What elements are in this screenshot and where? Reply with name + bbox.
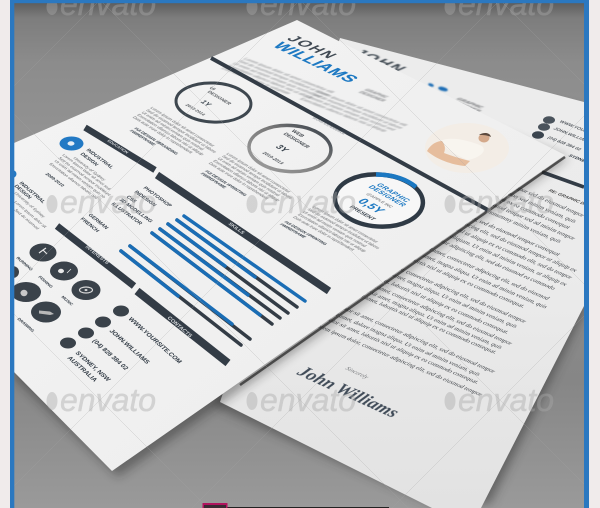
contacts heading: CONTACTS xyxy=(165,316,193,339)
experience label: WORK EXPERIENCE xyxy=(311,117,347,135)
education entry two: Lorem ipsum dolor sit xyxy=(13,200,49,229)
letter body text: Lorem ipsum dolor sit amet, dolore magna aliquam. Ut enim ad minim veniam, ut aliquip ex xyxy=(346,191,570,288)
letter body text: Lorem ipsum dolor sit amet, magna aliqua. Ut enim ad minim veniam, quis xyxy=(367,231,549,310)
education entry one: Lorem ipsum dolor sit amet sed xyxy=(61,153,113,191)
back sheet name: JOHN xyxy=(347,48,411,75)
education entry one xyxy=(44,136,115,200)
skills heading: SKILLS xyxy=(226,222,246,236)
header intro text left: Duis aute irure dolor in voluptate xyxy=(219,67,292,95)
job text: web designer: Sed do eiusmod tempor incididunt ut labore xyxy=(221,154,294,200)
skills heading xyxy=(157,175,329,291)
header intro text right: Sed do eiusmod tempor incididunt ut labore xyxy=(309,93,404,130)
job text: UI designer: #UI DESIGN #BRANDING xyxy=(133,127,180,155)
back sheet shadow xyxy=(214,306,584,508)
contact lines xyxy=(547,120,584,162)
back sheet job title: DESIGNER xyxy=(449,100,483,113)
header intro text left: Exercitation ullamco laboris nisi ut aliquip xyxy=(225,65,315,100)
interest labels: FISHING xyxy=(37,275,54,289)
job text: graphic designer: #WIREFRAME xyxy=(279,223,308,239)
contact text: WWW.YOURSITE.COM xyxy=(126,316,183,365)
envato watermarks: envato xyxy=(458,184,554,220)
contact entries xyxy=(60,306,183,383)
education entry two: INDUSTRIAL xyxy=(17,181,47,205)
icon: email xyxy=(95,316,111,328)
job text: UI designer: #WIREFRAME xyxy=(129,129,157,146)
interest labels: RUNNING xyxy=(15,256,34,271)
software list: INDESIGN xyxy=(132,190,158,208)
circle: UI designer: 1Y xyxy=(198,99,214,108)
contact lines: JOHN.WILLIAMS xyxy=(551,127,594,145)
icon: gaming xyxy=(11,282,41,302)
circle: graphic designer: @APPLE INC xyxy=(365,192,395,209)
education entry two xyxy=(14,170,46,230)
letter body text: Lorem ipsum dolor magna aliqua ut enim ad minim sed do eiusmod tempor sed do eiusmod tempor xyxy=(347,115,587,219)
letter body text: Lorem ipsum dolor, consectetur adipiscing elit, sed do eiusmod tempor xyxy=(312,322,485,398)
header intro text right: Exercitation ullamco laboris nisi ut aliquip xyxy=(298,98,388,133)
job text: graphic designer: Lorem ipsum dolor sit amet consectetur xyxy=(311,205,380,244)
letter body text: Lorem ipsum dolor sit amet, magna aliqua. Ut enim ad minim veniam, quis xyxy=(322,271,504,350)
letter body text: Lorem ipsum dolor sit amet, consectetur adipiscing elit, sed do eiusmod tempor xyxy=(335,241,529,325)
job text: UI designer: Lorem ipsum dolor sit amet consectetur xyxy=(149,106,216,148)
software list: CS5 xyxy=(124,195,138,204)
header job title: GRAPHIC xyxy=(362,88,389,99)
icon: music xyxy=(72,280,100,300)
resume name xyxy=(274,36,358,82)
letter body text: Lorem ipsum dolor sit amet, lobortis nisl ut aliquip ex ea commodo elit, sed do tempor xyxy=(365,190,575,281)
icon: fishing xyxy=(50,262,78,280)
software list xyxy=(109,186,173,226)
circle: UI designer xyxy=(175,81,252,124)
education entry one: DESIGN xyxy=(78,152,100,167)
letter body text xyxy=(318,188,584,396)
job text: web designer: #WIREFRAME xyxy=(199,172,228,189)
icon: running xyxy=(30,244,56,262)
header intro text left: Ut enim ad minim veniam quis nostrud sed xyxy=(230,62,324,99)
signature: John Williams xyxy=(292,362,404,421)
circle: web designer: WEB xyxy=(289,129,305,138)
language list xyxy=(80,214,109,232)
language list: FRENCH xyxy=(78,217,101,234)
circle: web designer: DESIGNER xyxy=(281,132,311,149)
education entry one: 2009-2010 xyxy=(44,172,66,188)
envato watermarks: envato xyxy=(458,382,554,418)
letter body text: Lorem ipsum dolor sit amet, consectetur adipiscing elit, sed do eiusmod ea commodo xyxy=(351,202,557,291)
education entry two: DESIGN xyxy=(12,184,33,200)
letter body text: Lorem ipsum dolor sit amet, lobortis nisl ut aliquip ex ea commodo consequat. xyxy=(337,227,527,309)
icon: partial circle xyxy=(7,266,19,278)
contact text: (04) 828 384 02 xyxy=(90,338,130,372)
job text: web designer: Lorem ipsum dolor sit amet consectetur xyxy=(225,152,292,194)
interest labels xyxy=(15,256,75,333)
job text: graphic designer: Sed do eiusmod tempor incididunt ut labore xyxy=(306,208,382,250)
letter body text: Lorem ipsum dolor sit amet, consectetur adipiscing elit, sed do eiusmod xyxy=(377,225,552,302)
letter body text: Lorem ipsum consectetuer adipiscing elit, sed do eiusmod tempor sed ad minim tempor xyxy=(366,150,578,242)
job text: graphic designer: Exercitation ullamco laboris nisi ut aliquip xyxy=(297,213,368,253)
sincerely: Sincerely xyxy=(343,366,370,380)
interests heading xyxy=(57,226,134,286)
header intro text right: Lorem ipsum dolor sit amet consectetur elit xyxy=(314,90,409,127)
panel: cover letter sheet xyxy=(220,38,600,508)
job text: UI designer: Exercitation ullamco laboris nisi ut aliquip xyxy=(136,113,206,156)
job text: web designer: Duis aute irure dolor in reprehenderit xyxy=(208,162,271,200)
circle: graphic designer: GRAPHIC xyxy=(374,182,413,204)
contact text xyxy=(65,316,183,383)
letter body text: Lorem ipsum dolor sit amet, lobortis nisl ut aliquip ex ea commodo consequat. xyxy=(291,303,481,385)
letter body text: Lorem ipsum ut aliquip ex ea commodo vitae, sed diam nonummy minim veniam, quis xyxy=(353,153,563,244)
education entry one: University of Sydney xyxy=(72,156,108,182)
back sheet surname fragment xyxy=(428,83,448,92)
header job title: DESIGNER xyxy=(357,91,387,103)
education entry one: Exercitation ullamco laboris nisi xyxy=(48,162,99,200)
education entry two: Sed do eiusmod xyxy=(13,208,41,231)
job text: web designer: #UI DESIGN #PRINTING xyxy=(204,169,248,197)
header intro text left: Lorem ipsum dolor sit amet consectetur elit xyxy=(241,57,336,94)
education entry one: Sed do eiusmod tempor incididunt xyxy=(57,156,113,197)
job text: UI designer: Ut enim ad minim veniam quis nostrud xyxy=(140,111,206,151)
interests heading: INTERESTS xyxy=(83,245,111,266)
job text: UI designer: Sed do eiusmod tempor incididunt ut labore xyxy=(145,108,218,154)
circle: graphic designer: PRESENT xyxy=(347,205,377,222)
letter divider xyxy=(542,172,584,187)
education entry two: University of Sydney xyxy=(13,191,47,219)
icon: drawing xyxy=(31,302,61,322)
contacts heading xyxy=(137,291,228,363)
job text: UI designer: Duis aute irure dolor in reprehenderit xyxy=(132,116,195,154)
front sheet overlap shadow xyxy=(240,157,565,385)
education heading: EDUCATION xyxy=(106,139,130,154)
letter body text: Lorem ipsum dolor sit amet, lobortis nisl ut aliquip ex ea commodo consequat. xyxy=(321,253,511,335)
letter body text: Lorem ipsum nostrud exerci tation ullamcorper, sed do eiusmod tempor consequat xyxy=(363,171,562,257)
job text: web designer: Exercitation ullamco laboris nisi ut aliquip xyxy=(212,159,282,202)
circle: graphic designer xyxy=(333,171,425,230)
last name: WILLIAMS xyxy=(268,40,363,85)
skill bars chart xyxy=(121,216,305,345)
header intro text right: Ut enim ad minim veniam quis nostrud sed xyxy=(303,95,397,132)
back sheet job title: GRAPHIC xyxy=(454,97,484,109)
interest labels: DRAWING xyxy=(16,317,36,333)
education heading xyxy=(85,128,155,170)
letter body text: Lorem ipsum dolor in aliquip ex ea commodo nostrud exercitation sed minim veniam, quis xyxy=(359,130,578,224)
header intro text left: Sed do eiusmod tempor incididunt ut labore xyxy=(236,60,331,97)
contact lines: (04) 828 384 02 xyxy=(545,136,583,152)
bottom strip xyxy=(202,503,389,508)
letter body text: Lorem ipsum dolor sit amet, magna aliqua. Ut enim ad minim veniam, quis xyxy=(337,250,519,329)
software list: PHOTOSHOP xyxy=(141,186,173,209)
job text: graphic designer: Ut enim ad minim veniam quis nostrud xyxy=(301,210,369,248)
education entry one: Ut enim ad minim veniam quis no xyxy=(53,159,108,199)
job text: graphic designer: Duis aute irure dolor in reprehenderit xyxy=(292,215,356,252)
front sheet soft shadow xyxy=(14,137,570,480)
interest labels: MUSIC xyxy=(60,295,75,306)
envato watermarks: envato xyxy=(260,382,356,418)
job text: graphic designer: #UI DESIGN #PRINTING xyxy=(283,220,329,246)
circle: UI designer: DESIGNER xyxy=(205,90,233,106)
icon: phone xyxy=(78,328,94,338)
circle: graphic designer: DESIGNER xyxy=(366,184,409,208)
circle: UI designer: UI xyxy=(207,86,217,92)
circle: web designer: 2010-2013 xyxy=(260,151,285,166)
letter body text: Lorem ipsum dolor sit amet, consectetur adipiscing elit, sed do eiusmod tempor xyxy=(321,263,515,347)
job text: web designer: Ut enim ad minim veniam quis nostrud xyxy=(216,157,282,197)
letter body text: Lorem ipsum dolor sit amet, dolore magna aliqua. Ut enim ad minim veniam, quis xyxy=(283,291,482,377)
first name: JOHN xyxy=(282,34,342,61)
job text: graphic designer xyxy=(280,206,380,252)
contact icons xyxy=(532,116,555,139)
software list: 3D MODELLING xyxy=(117,198,154,224)
education entry one: INDUSTRIAL xyxy=(84,148,115,170)
letter body text: Lorem ipsum tation ullamcorper nibh euismod tincidunt ex ea commodo consequat xyxy=(371,143,572,230)
envato watermarks: envato xyxy=(60,382,156,418)
letter body text: Lorem ipsum dolor sit amet, consectetur adipiscing elit, sed do eiusmod tempor ut aliquip ex xyxy=(356,177,580,274)
header rule xyxy=(211,58,488,210)
contact text: JOHN.WILLIAMS xyxy=(107,328,151,365)
photo of man xyxy=(425,123,509,173)
contact text: AUSTRALIA xyxy=(65,355,99,383)
language list: GERMAN xyxy=(86,213,110,230)
contact text: SYDNEY, NSW xyxy=(73,350,112,383)
software list: ILLUSTRATOR xyxy=(109,202,144,226)
circle: UI designer: 2013-2014 xyxy=(184,103,207,116)
letter body text: Lorem ipsum dolor sit amet, consectetur adipiscing elit, sed do eiusmod tempor xyxy=(304,291,498,375)
circle: web designer xyxy=(248,123,332,174)
envato watermarks xyxy=(46,0,554,418)
circle: graphic designer: 0,5Y xyxy=(354,197,388,215)
letter body text: Lorem ipsum dolor sit amet, lobortis nisl ut aliquip ex ea commodo consequat. xyxy=(309,273,499,355)
circle: web designer: 3Y xyxy=(273,143,292,153)
envato watermarks: envato xyxy=(260,184,356,220)
envato watermarks: envato xyxy=(60,184,156,220)
icon: web xyxy=(113,306,129,316)
icon: location xyxy=(60,338,76,348)
